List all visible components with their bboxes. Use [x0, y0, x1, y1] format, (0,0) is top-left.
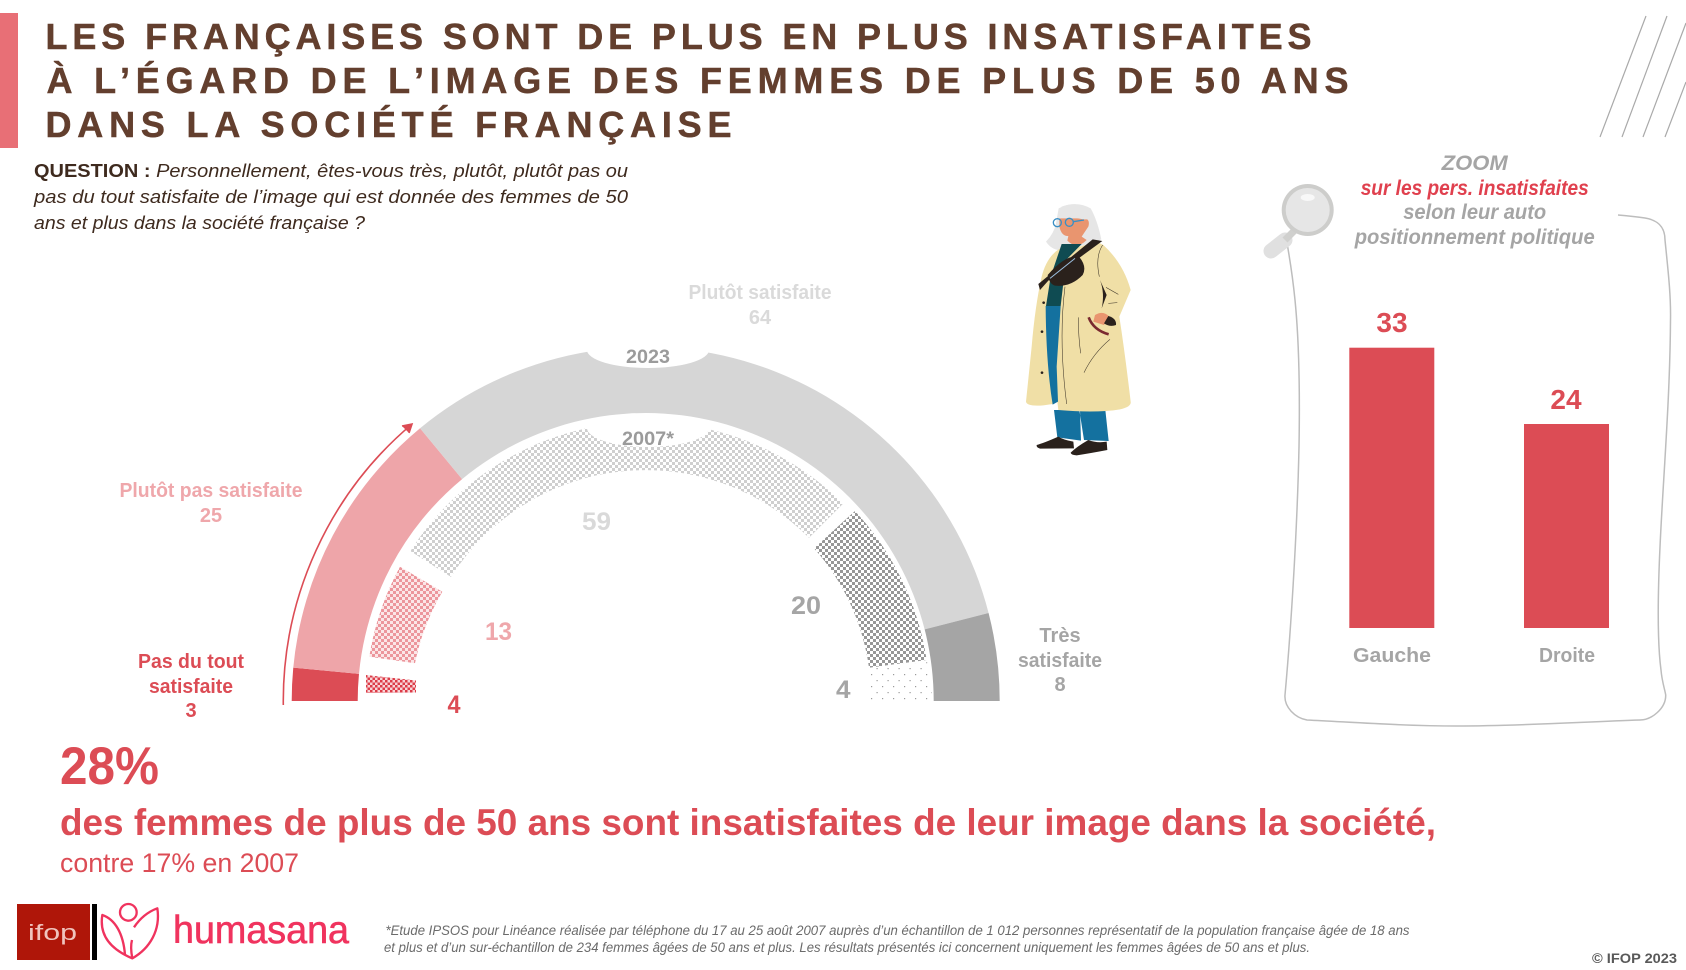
bar chart: political position	[1349, 307, 1609, 667]
zoom heading	[1354, 152, 1595, 249]
gauge chart	[120, 282, 1102, 722]
question text: ans et plus dans la société française ?	[34, 212, 366, 233]
icon: woman illustration	[1026, 204, 1131, 455]
label: plutot pas satisfaite: 25	[200, 505, 222, 527]
2007 values: 20	[791, 592, 821, 620]
zoom heading: selon leur auto	[1403, 201, 1546, 224]
label: tres satisfaite: Très	[1039, 625, 1081, 647]
icon: magnifying glass	[1271, 184, 1334, 251]
year labels: 2007*	[622, 429, 675, 450]
question text: pas du tout satisfaite de l’image qui est donnée des femmes de 50	[33, 186, 629, 207]
question text	[33, 160, 629, 233]
label: tres satisfaite: 8	[1054, 674, 1066, 696]
logo: ifop	[17, 904, 97, 960]
title: LES FRANÇAISES SONT DE PLUS EN PLUS INSATISFAITES	[46, 16, 1312, 57]
label: pas du tout satisfaite: 3	[185, 700, 197, 722]
question text: QUESTION : Personnellement, êtes-vous très, plutôt, plutôt pas ou	[34, 160, 628, 181]
bar chart: political position: 33	[1376, 307, 1408, 338]
title: À L’ÉGARD DE L’IMAGE DES FEMMES DE PLUS DE 50 ANS	[46, 60, 1348, 101]
logo: humasana: humasana	[173, 909, 350, 952]
zoom heading: sur les pers. insatisfaites	[1361, 177, 1589, 200]
label: pas du tout satisfaite: Pas du tout	[138, 651, 244, 673]
headline sentence: des femmes de plus de 50 ans sont insatisfaites de leur image dans la société,	[60, 802, 1436, 843]
outer ring 2023	[292, 332, 1000, 701]
logo: ifop: ifop	[28, 920, 77, 945]
year labels: 2023	[626, 347, 670, 368]
label: plutot satisfaite: Plutôt satisfaite	[688, 282, 832, 304]
bar chart: political position: Droite	[1539, 645, 1595, 667]
label: plutot pas satisfaite	[120, 480, 302, 527]
label: plutot pas satisfaite: Plutôt pas satisfaite	[120, 480, 302, 502]
comparison sentence: contre 17% en 2007	[60, 848, 299, 878]
label: tres satisfaite	[1018, 625, 1102, 696]
inner ring 2007	[366, 409, 932, 701]
label: pas du tout satisfaite	[138, 651, 244, 722]
2007 values: 4	[448, 691, 461, 719]
footnote: *Etude IPSOS pour Linéance réalisée par téléphone du 17 au 25 août 2007 auprès d’un échantillon de 1 012 personnes représentatif de la population française âgée de 18 ans	[386, 923, 1410, 938]
year labels	[622, 347, 675, 450]
footnote: et plus et d’un sur-échantillon de 234 femmes âgées de 50 ans et plus. Les résultats présentés ici concernent uniquement les femmes âgées de 50 ans et plus.	[384, 940, 1310, 955]
logo: humasana	[102, 904, 350, 958]
arrow	[283, 424, 412, 705]
zoom heading: ZOOM	[1441, 152, 1508, 175]
label: pas du tout satisfaite: satisfaite	[149, 676, 233, 698]
footnote	[384, 923, 1410, 955]
decorative diagonal lines	[1600, 16, 1686, 137]
label: plutot satisfaite: 64	[749, 307, 772, 329]
accent bar	[0, 13, 18, 148]
2007 values: 59	[582, 508, 611, 536]
panel: zoom outline	[1285, 215, 1671, 726]
title	[46, 16, 1348, 145]
bar chart: political position: 24	[1550, 384, 1582, 415]
zoom heading: positionnement politique	[1354, 226, 1595, 249]
2007 values: 4	[836, 676, 851, 704]
headline figure: 28%	[60, 737, 159, 796]
label: tres satisfaite: satisfaite	[1018, 650, 1102, 672]
bar chart: political position: Gauche	[1353, 645, 1431, 667]
2007 values: 13	[485, 618, 512, 646]
2007 values	[448, 508, 851, 719]
title: DANS LA SOCIÉTÉ FRANÇAISE	[46, 104, 732, 145]
label: plutot satisfaite	[688, 282, 832, 329]
copyright: © IFOP 2023	[1592, 950, 1677, 966]
